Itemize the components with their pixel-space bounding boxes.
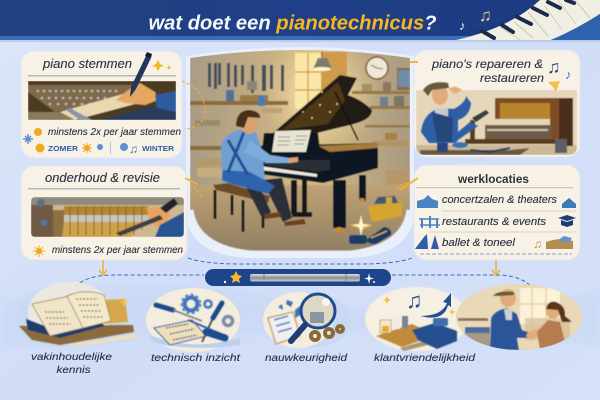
- figure: repairman: [421, 82, 489, 143]
- row: ballet & toneel: ballet & toneel: [442, 237, 516, 249]
- label: zomer: ZOMER: [48, 144, 79, 153]
- tool wall: [190, 63, 288, 177]
- skill: nauwkeurigheid: [263, 292, 350, 364]
- icon: open book on stack: [19, 292, 140, 347]
- text: minstens 2x per jaar stemmen: minstens 2x per jaar stemmen: [48, 127, 181, 138]
- heading: onderhoud & revisie: onderhoud & revisie: [45, 171, 160, 185]
- tuning tools on floor: [349, 215, 391, 244]
- icon: gears and tools: [154, 294, 232, 345]
- heading: werklocaties: werklocaties: [457, 174, 529, 186]
- icon: sparkles: [152, 60, 172, 71]
- label: nauwkeurigheid: nauwkeurigheid: [265, 352, 348, 364]
- icon: magnifying glass: [291, 294, 335, 341]
- row: restaurants & events: restaurants & events: [442, 216, 547, 228]
- connector arrows to panels: [99, 62, 500, 275]
- label: technisch inzicht: technisch inzicht: [151, 352, 241, 364]
- right shelves: [352, 68, 410, 185]
- icon: sun and snow: [23, 128, 44, 152]
- icon: book with note shapes: [268, 300, 302, 344]
- icon: sparkles: [383, 296, 455, 315]
- dashed connector lines: [75, 258, 531, 287]
- panel: werklocaties: [414, 165, 580, 260]
- skill: klantvriendelijkheid: [365, 287, 476, 364]
- row: restaurants & events: [419, 215, 576, 228]
- row: concertzalen & theaters: [417, 194, 576, 208]
- icon: yellow arrow: [548, 81, 560, 92]
- label: klantvriendelijkheid: klantvriendelijkheid: [374, 352, 476, 364]
- icon: tuning pen: [130, 52, 152, 97]
- grand piano: [253, 75, 378, 233]
- icon: sun: [33, 245, 45, 257]
- illustration: handshake with customer: [456, 284, 582, 351]
- divider pill with tuning lever: [205, 269, 391, 286]
- heading: piano stemmen: piano stemmen: [42, 57, 132, 71]
- label: vakinhoudelijke kennis: vakinhoudelijke: [31, 351, 112, 363]
- panel: piano's repareren & restaureren: [414, 50, 580, 157]
- ceiling lamp: [313, 52, 332, 71]
- music notes: ♪: [459, 18, 466, 33]
- title: wat doet een pianotechnicus?: [148, 12, 437, 34]
- wall clock: [366, 57, 388, 79]
- icon: music notes: ♪: [565, 67, 572, 82]
- row: ballet & toneel: [415, 234, 573, 251]
- label: vakinhoudelijke kennis: kennis: [56, 364, 91, 376]
- icon: music notes: [547, 57, 572, 82]
- icon: music notes: ♫: [547, 57, 560, 77]
- panel: onderhoud & revisie: [21, 166, 187, 260]
- panel: piano stemmen: [21, 51, 182, 158]
- heading: piano's repareren & restaureren: restaureren: [480, 73, 544, 85]
- text: minstens 2x per jaar stemmen: minstens 2x per jaar stemmen: [52, 245, 183, 256]
- piano keys decoration: [440, 0, 600, 40]
- icon: rising arrow and notes: ♫: [406, 288, 422, 313]
- music notes: ♫: [479, 6, 492, 25]
- image: repairman and upright piano: [416, 90, 577, 155]
- central illustration: technician at grand piano: [186, 35, 414, 258]
- icon: star: [119, 297, 129, 307]
- image: tuning hand and keyboard: [28, 81, 176, 120]
- header banner: [0, 0, 600, 42]
- row: ballet & toneel: ♫: [533, 237, 542, 251]
- icon: season symbols: [82, 142, 128, 154]
- skill: technisch inzicht: [146, 288, 241, 364]
- music notes: [459, 6, 492, 33]
- piano bench: [213, 183, 270, 232]
- icon: music note: ♫: [129, 142, 138, 156]
- icon: workbench with supplies: [376, 314, 457, 351]
- heading: piano's repareren & restaureren: piano's repareren &: [431, 59, 543, 71]
- technician: [221, 110, 306, 226]
- window: [295, 52, 347, 114]
- skill: vakinhoudelijke kennis: [17, 282, 140, 376]
- toolbox: [368, 196, 402, 222]
- row: concertzalen & theaters: concertzalen & theaters: [442, 194, 558, 206]
- icon: tuning pins: [311, 326, 343, 340]
- label: winter: WINTER: [142, 144, 175, 153]
- image: piano action repair: [31, 197, 184, 237]
